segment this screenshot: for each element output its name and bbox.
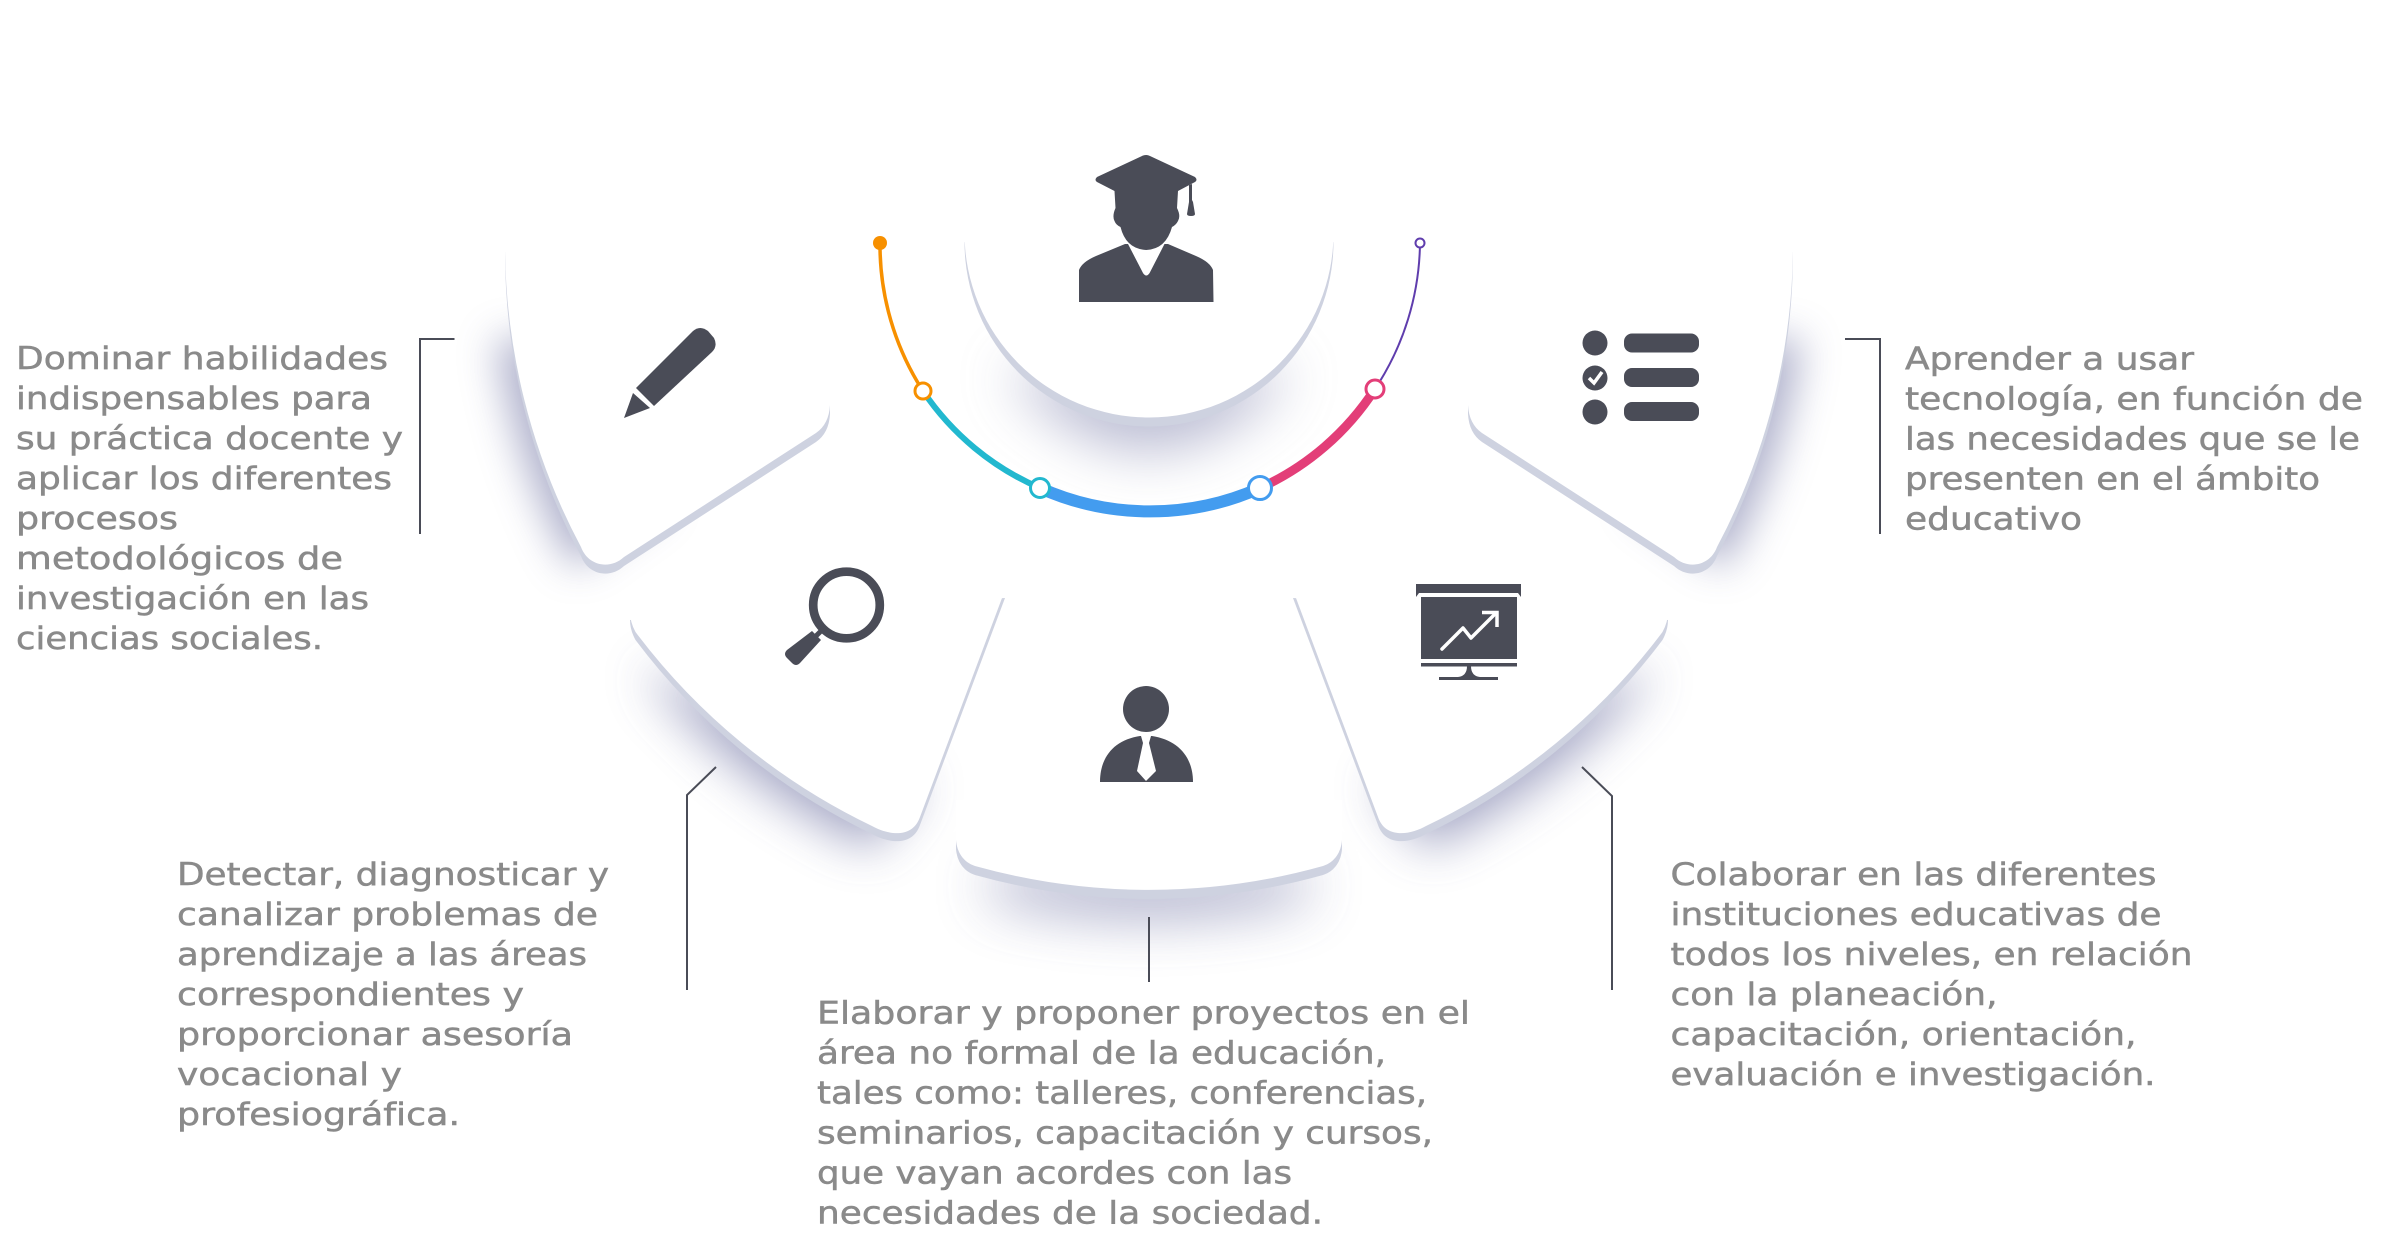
text block: Aprender a usar: presenten en el ámbito [1905,462,2320,498]
connector: top-right bracket [1845,339,1880,534]
text block: Elaborar y proponer: Elaborar y proponer proyectos en el [817,996,1470,1032]
panel: top-right segment [1468,243,1802,574]
text block: Dominar habilidades: indispensables para [16,381,372,417]
icon: checklist [1582,330,1699,424]
icon: presentation board [1416,584,1521,680]
connector: top-left bracket [420,339,454,534]
connector: lower-left [687,767,716,990]
colored progress arc [873,236,1424,511]
text block: Dominar habilidades: ciencias sociales. [16,621,323,657]
text block: Aprender a usar: Aprender a usar [1905,342,2194,378]
panel: lower-left segment [630,572,1005,849]
text block: Colaborar: todos los niveles, en relación [1670,937,2192,973]
text block: Aprender a usar [1905,342,2363,538]
text block: Colaborar: Colaborar en las diferentes [1670,857,2156,893]
text block: Dominar habilidades: investigación en las [16,581,369,617]
text block: Detectar, diagnosticar: Detectar, diagnosticar y [177,857,609,893]
text block: Colaborar [1670,857,2192,1093]
connector: lower-right [1582,767,1612,990]
text block: Elaborar y proponer: necesidades de la sociedad. [817,1196,1323,1232]
panel: bottom segment [956,686,1342,916]
text block: Detectar, diagnosticar: aprendizaje a las áreas [177,937,587,973]
text block: Detectar, diagnosticar: canalizar problemas de [177,897,598,933]
panel: center graduate segment [964,155,1334,450]
text block: Aprender a usar: educativo [1905,502,2082,538]
text block: Detectar, diagnosticar: proporcionar asesoría [177,1017,573,1053]
text block: Dominar habilidades: metodológicos de [16,541,343,577]
text block: Elaborar y proponer: que vayan acordes con las [817,1156,1292,1192]
text block: Aprender a usar: tecnología, en función de [1905,382,2363,418]
text block: Colaborar: capacitación, orientación, [1670,1017,2136,1053]
text block: Elaborar y proponer: área no formal de la educación, [817,1036,1386,1072]
icon: pencil [624,328,716,418]
panel: top-left segment [496,243,830,574]
text block: Elaborar y proponer [817,996,1470,1232]
text block: Detectar, diagnosticar [177,857,609,1133]
text block: Elaborar y proponer: tales como: talleres, conferencias, [817,1076,1427,1112]
text block: Aprender a usar: las necesidades que se le [1905,422,2360,458]
text block: Detectar, diagnosticar: correspondientes y [177,977,524,1013]
text block: Colaborar: con la planeación, [1670,977,1998,1013]
icon: magnifier [785,572,880,665]
text block: Colaborar: evaluación e investigación. [1670,1057,2156,1093]
text block: Elaborar y proponer: seminarios, capacitación y cursos, [817,1116,1433,1152]
connector: bottom [1148,917,1150,982]
icon: graduate [1079,155,1214,302]
text block: Dominar habilidades: aplicar los diferentes [16,461,392,497]
text block: Dominar habilidades [16,341,403,657]
text block: Dominar habilidades: procesos [16,501,178,537]
text block: Dominar habilidades: su práctica docente y [16,421,403,457]
text block: Colaborar: instituciones educativas de [1670,897,2162,933]
icon: person with tie [1100,686,1193,782]
text block: Detectar, diagnosticar: profesiográfica. [177,1097,460,1133]
text block: Detectar, diagnosticar: vocacional y [177,1057,402,1093]
panel: lower-right segment [1293,584,1668,849]
text block: Dominar habilidades: Dominar habilidades [16,341,388,377]
